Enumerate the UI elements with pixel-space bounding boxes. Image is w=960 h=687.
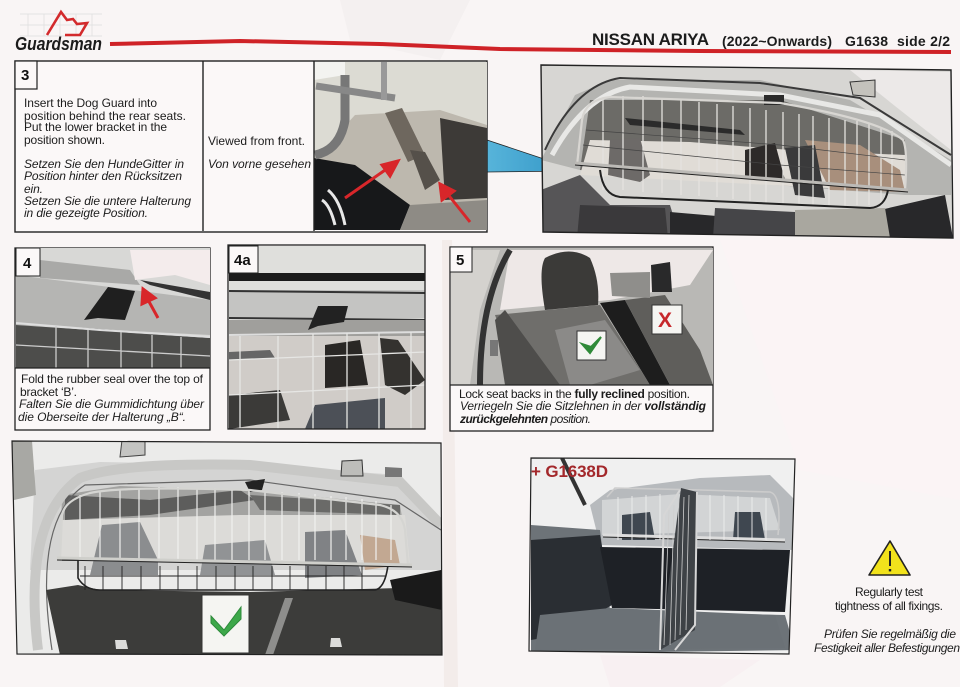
arrow: red right (440, 184, 470, 222)
icon: warning triangle (869, 541, 910, 575)
arrow: red up (142, 289, 158, 318)
warning text: tightness of all fixings. (835, 599, 943, 613)
panel: step 5 (450, 247, 713, 431)
photo frame: guard fitted (541, 65, 953, 238)
step 3 instructions: Setzen Sie den HundeGitter in (24, 157, 184, 171)
arrow: red left (345, 161, 398, 198)
step 4 instructions: bracket ‘B’. (20, 385, 77, 399)
step 4 instructions (18, 372, 205, 424)
panel: step 4a (228, 245, 425, 429)
step 3 instructions: Insert the Dog Guard into (24, 96, 157, 110)
viewed from front note: Von vorne gesehen (208, 157, 311, 171)
cross badge (652, 305, 682, 334)
step number 4a: 4a (234, 252, 251, 269)
step 3 instructions: ein. (24, 182, 43, 196)
logo: Guardsman: Guardsman (15, 34, 102, 54)
step number 4: 4 (23, 255, 32, 272)
step number 3: 3 (21, 67, 29, 84)
step 3 instructions: in die gezeigte Position. (24, 206, 148, 220)
photo frame: divider option (529, 458, 795, 654)
header red rule (110, 41, 951, 52)
cross badge: X (658, 309, 672, 332)
step number 4a (229, 246, 258, 273)
panel: step 3 (15, 61, 487, 232)
viewed from front note (208, 134, 311, 171)
warning text (814, 585, 960, 655)
logo: Guardsman (15, 12, 102, 54)
step 5 instructions: zurückgelehnten position. (459, 412, 591, 426)
step 5 instructions (459, 387, 707, 426)
photo frame: full guard (12, 441, 442, 655)
header title: (2022~Onwards) (722, 33, 832, 49)
step 4 instructions: die Oberseite der Halterung „B“. (18, 410, 186, 424)
step number 5 (450, 247, 472, 272)
step number 4 (16, 248, 40, 276)
step 3 instructions: Setzen Sie die untere Halterung (24, 194, 191, 208)
photo: lower bracket (314, 62, 487, 230)
panel: step 4 (15, 248, 210, 430)
tick badge large (202, 595, 249, 653)
G1638D label: + G1638D (531, 462, 608, 481)
step 5 instructions: Verriegeln Sie die Sitzlehnen in der vollständig (460, 399, 707, 413)
photo: rubber seal (16, 248, 210, 370)
step 3 instructions: Position hinter den Rücksitzen (24, 169, 182, 183)
tick badge (577, 331, 606, 360)
step 3 instructions: Put the lower bracket in the (24, 120, 167, 134)
warning text: Regularly test (855, 585, 924, 599)
step number 3 (15, 61, 37, 89)
photo: bracket through guard (229, 246, 425, 429)
step number 5: 5 (456, 252, 464, 269)
step 3 instructions: position behind the rear seats. (24, 109, 186, 123)
photo: full guard from boot (12, 440, 442, 656)
step 4 instructions: Fold the rubber seal over the top of (21, 372, 204, 386)
step 5 instructions: Lock seat backs in the fully reclined position. (459, 387, 690, 401)
header title (592, 30, 950, 49)
header title: G1638 (845, 33, 888, 49)
warning text: Festigkeit aller Befestigungen (814, 641, 960, 655)
step 3 instructions (24, 96, 191, 220)
photo: reclined seats (451, 248, 713, 385)
header title: side 2/2 (897, 33, 950, 49)
photo: guard fitted behind rear seats (541, 65, 953, 240)
warning text: Prüfen Sie regelmäßig die (824, 627, 956, 641)
step 3 instructions: position shown. (24, 133, 105, 147)
viewed from front note: Viewed from front. (208, 134, 305, 148)
step 4 instructions: Falten Sie die Gummidichtung über (19, 397, 205, 411)
blue callout wedge (487, 140, 580, 172)
photo: G1638D divider option (531, 458, 795, 654)
header title: NISSAN ARIYA (592, 30, 709, 49)
